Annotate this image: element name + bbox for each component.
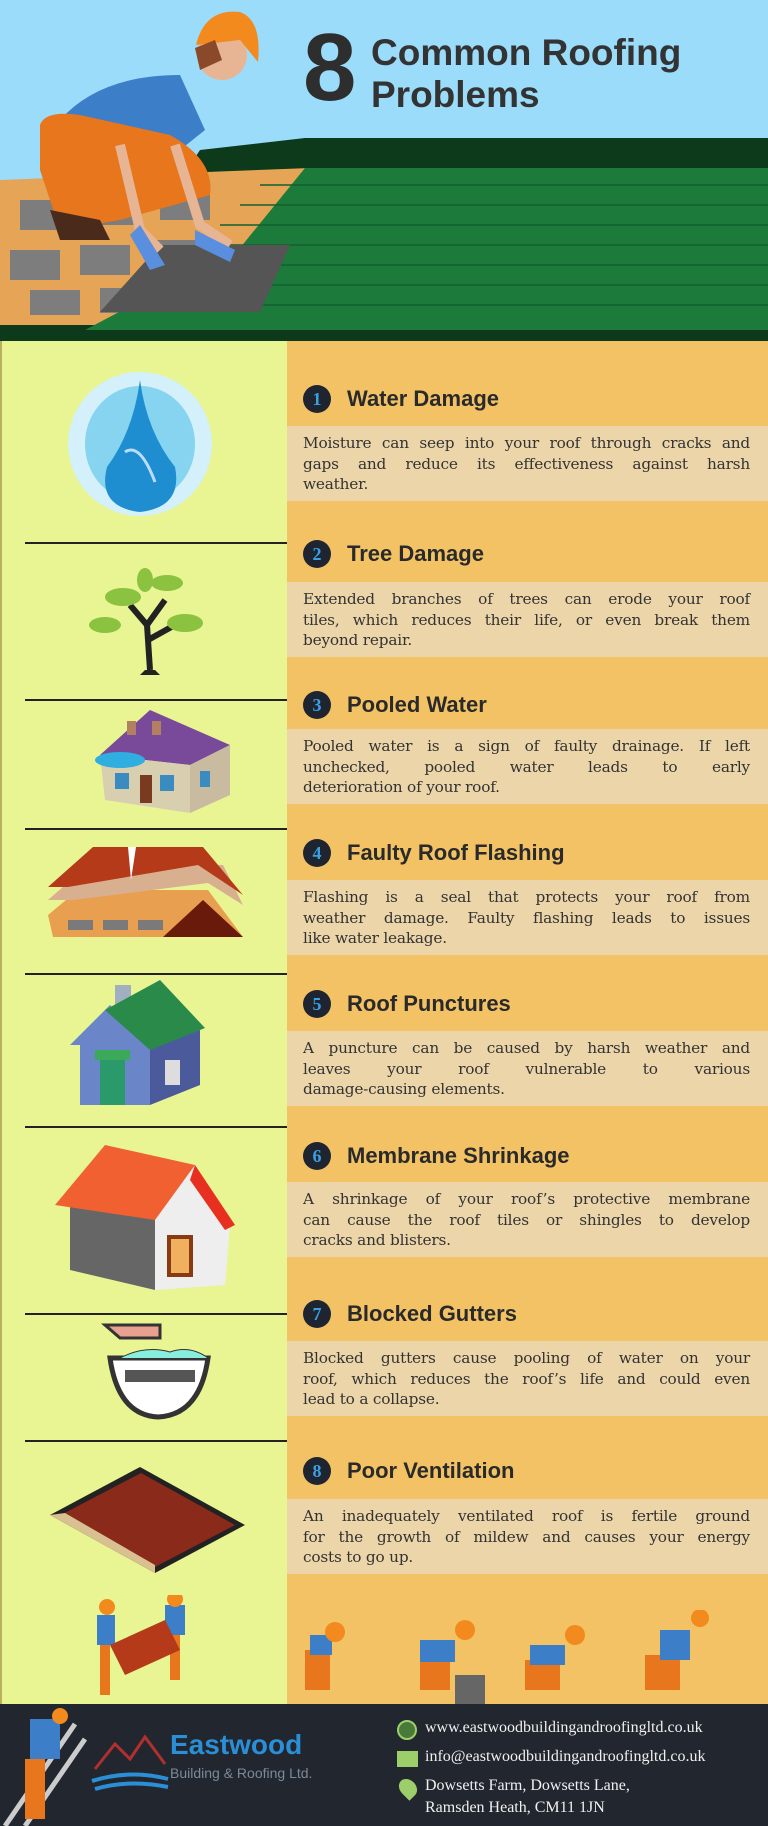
- text: Flashing is a seal that protects your roof from: [303, 888, 750, 906]
- left column: [0, 341, 287, 1704]
- text: cracks and blisters.: [303, 1231, 451, 1249]
- footer: [0, 1704, 768, 1826]
- icon: water drop: [68, 372, 212, 516]
- contact info: www.eastwoodbuildingandroofingltd.co.uk: [425, 1719, 703, 1736]
- text: weather.: [303, 475, 368, 493]
- icon: house puncture: [70, 980, 205, 1105]
- item 3: [303, 691, 487, 719]
- item 1: Water Damage: [347, 386, 499, 411]
- title: [303, 14, 681, 121]
- icon: tree: [89, 568, 203, 675]
- text: tiles, which reduces their life, or even break them: [303, 610, 750, 628]
- icon: gutter: [101, 1324, 211, 1420]
- text: for the growth of mildew and causes your energy: [303, 1528, 750, 1546]
- text: roof, which reduces the roof’s life and could even: [303, 1370, 750, 1388]
- item 5: 5: [312, 994, 322, 1014]
- item 2: 2: [312, 544, 322, 564]
- icon: house membrane: [55, 1145, 235, 1290]
- item 8: 8: [312, 1460, 322, 1480]
- text: Extended branches of trees can erode your roof: [303, 590, 750, 608]
- title: Problems: [371, 74, 540, 115]
- text: An inadequately ventilated roof is fertile ground: [303, 1507, 750, 1525]
- text: weather damage. Faulty flashing leads to issues: [303, 908, 750, 926]
- item 1: [303, 385, 499, 413]
- text: Pooled water is a sign of faulty drainage. If left: [303, 737, 750, 755]
- text: damage-causing elements.: [303, 1080, 505, 1098]
- icon: house pooled water: [95, 710, 230, 813]
- contact info: Dowsetts Farm, Dowsetts Lane,: [425, 1777, 630, 1794]
- item 5: Roof Punctures: [347, 991, 511, 1016]
- contact info: Ramsden Heath, CM11 1JN: [425, 1799, 605, 1816]
- text: lead to a collapse.: [303, 1390, 439, 1408]
- roof illustration: [0, 138, 768, 341]
- item 4: 4: [312, 842, 322, 862]
- contact info: [397, 1719, 706, 1816]
- item 1: 1: [312, 388, 322, 408]
- item 7: 7: [312, 1304, 322, 1324]
- item 4: Faulty Roof Flashing: [347, 840, 565, 865]
- item 3: Pooled Water: [347, 692, 487, 717]
- icon: workers carrying: [97, 1595, 185, 1695]
- item 3: 3: [312, 694, 322, 714]
- text: Moisture can seep into your roof through cracks and: [303, 434, 750, 452]
- icon: ventilation roof: [50, 1467, 245, 1573]
- icon: worker on ladder: [3, 1708, 87, 1826]
- text: can cause the roof tiles or shingles to develop: [303, 1210, 750, 1228]
- logo: Eastwood: [170, 1729, 302, 1760]
- text: leaves your roof vulnerable to various: [303, 1060, 750, 1078]
- text: gaps and reduce its effectiveness against harsh: [303, 454, 750, 472]
- item 8: Poor Ventilation: [347, 1458, 514, 1483]
- item 2: Tree Damage: [347, 541, 484, 566]
- worker: [40, 12, 259, 270]
- text: beyond repair.: [303, 631, 412, 649]
- text: A puncture can be caused by harsh weather and: [303, 1039, 750, 1057]
- text: deterioration of your roof.: [303, 778, 500, 796]
- item 6: 6: [312, 1146, 322, 1166]
- item 2: [303, 540, 484, 568]
- text: unchecked, pooled water leads to early: [303, 758, 750, 776]
- text: costs to go up.: [303, 1548, 413, 1566]
- item 6: Membrane Shrinkage: [347, 1143, 570, 1168]
- title: Common Roofing: [371, 32, 681, 73]
- text: Blocked gutters cause pooling of water on your: [303, 1349, 750, 1367]
- icon: workers row: [305, 1610, 709, 1704]
- item 7: Blocked Gutters: [347, 1301, 517, 1326]
- icon: roof flashing: [48, 847, 243, 937]
- header: [0, 0, 768, 341]
- title: 8: [303, 14, 352, 121]
- text: like water leakage.: [303, 929, 447, 947]
- contact info: info@eastwoodbuildingandroofingltd.co.uk: [425, 1748, 705, 1765]
- logo: [91, 1729, 312, 1791]
- logo: Building & Roofing Ltd.: [170, 1765, 312, 1781]
- text: A shrinkage of your roof’s protective membrane: [303, 1190, 750, 1208]
